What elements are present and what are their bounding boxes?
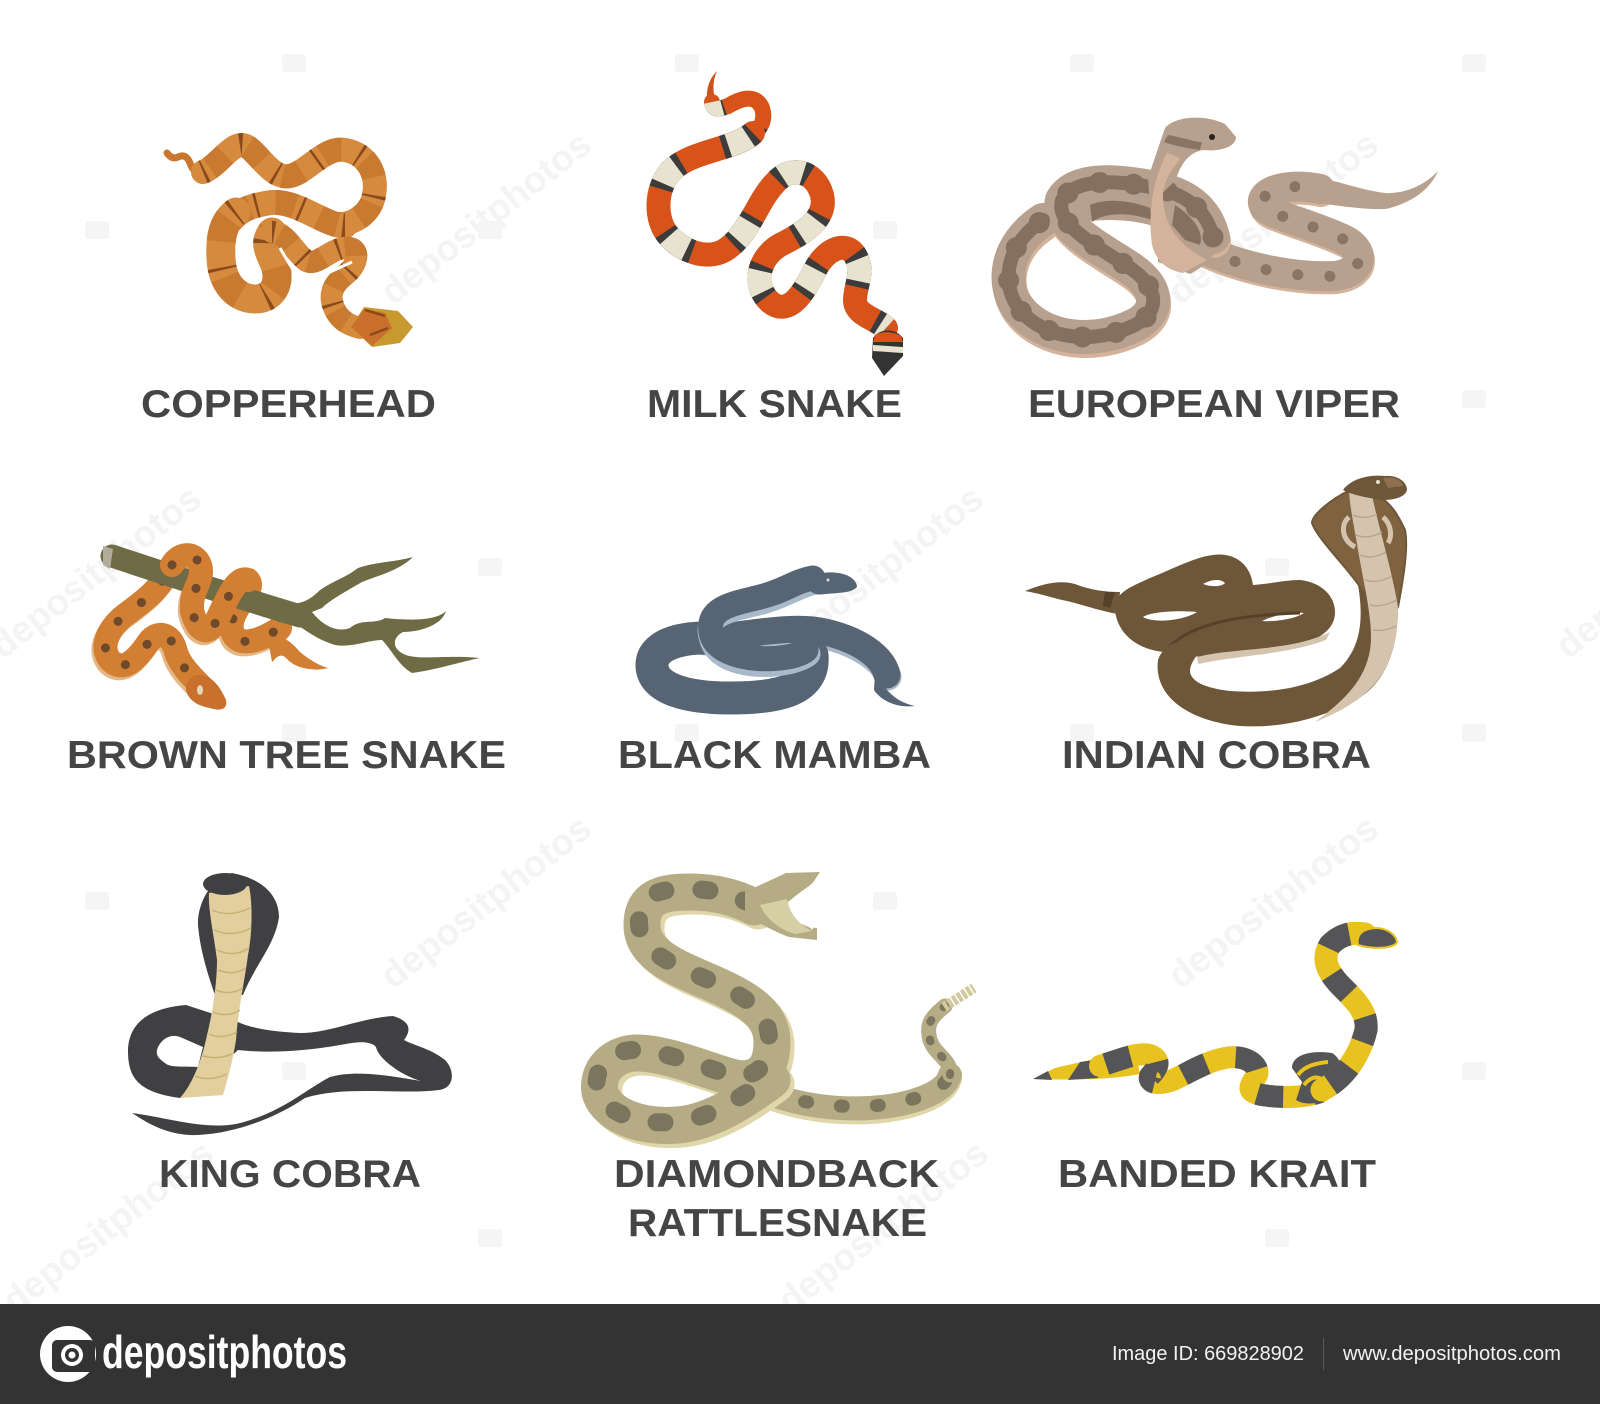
cobra belly ribs: [1353, 514, 1397, 630]
black mamba head: [808, 572, 857, 595]
footer bar: [0, 1304, 1600, 1404]
king cobra body: [128, 1005, 452, 1135]
label: indian cobra: INDIAN COBRA: [1062, 734, 1371, 777]
cobra head: [1343, 476, 1407, 500]
krait coil: [1292, 1052, 1343, 1104]
krait head: [1358, 928, 1397, 948]
watermark text layer: depositphotos: [1160, 123, 1386, 312]
snake: king cobra: [128, 873, 452, 1135]
snake: diamondback rattlesnake: [597, 872, 974, 1129]
viper top coil filler: [1068, 198, 1160, 205]
watermark text layer: depositphotos: [765, 477, 991, 666]
label: diamondback rattlesnake: [614, 1153, 939, 1245]
snake: copperhead: [167, 145, 413, 347]
watermark text layer: depositphotos: [0, 1132, 221, 1321]
watermark text layer: depositphotos: [373, 807, 599, 996]
label: copperhead: COPPERHEAD: [141, 383, 436, 426]
milk snake head: [872, 330, 903, 376]
cobra hood: [1312, 490, 1406, 607]
snake: indian cobra: [1025, 476, 1407, 726]
snake: banded krait: [1033, 928, 1397, 1104]
watermark text layer: depositphotos: [770, 1132, 996, 1321]
label: diamondback rattlesnake: RATTLESNAKE: [628, 1202, 927, 1245]
branch: [103, 546, 480, 673]
footer logo wordmark: depositphotos: [102, 1326, 347, 1378]
footer logo icon: [40, 1326, 96, 1382]
cobra tail: [1025, 582, 1120, 614]
king cobra head: [203, 873, 247, 895]
king cobra hood: [198, 873, 279, 995]
cobra hood marks: [1343, 517, 1391, 547]
label: milk snake: MILK SNAKE: [647, 383, 902, 426]
label: diamondback rattlesnake: DIAMONDBACK: [614, 1153, 939, 1196]
label: black mamba: BLACK MAMBA: [618, 734, 931, 777]
snake: brown tree snake: [103, 546, 480, 710]
footer website: www.depositphotos.com: [1342, 1343, 1561, 1365]
snake: milk snake: [658, 71, 903, 376]
cobra neck and lower body: [1158, 585, 1398, 726]
copperhead head: [351, 307, 413, 347]
rattlesnake open-mouth head: [745, 872, 820, 940]
viper raised neck: [1148, 118, 1236, 273]
viper tail: [1300, 171, 1438, 209]
label: brown tree snake: BROWN TREE SNAKE: [67, 734, 506, 777]
cobra upper coils: [1115, 554, 1335, 657]
snake: european viper: [1008, 118, 1438, 341]
snake: black mamba: [652, 572, 915, 706]
king cobra belly: [180, 886, 252, 1098]
krait tail: [1033, 1050, 1140, 1079]
label: king cobra: KING COBRA: [159, 1153, 421, 1196]
brown tree snake head: [186, 675, 226, 710]
cobra belly: [1315, 490, 1398, 722]
footer image id: Image ID: 669828902: [1112, 1343, 1304, 1365]
watermark text layer: depositphotos: [373, 123, 599, 312]
label: banded krait: BANDED KRAIT: [1058, 1153, 1376, 1196]
king cobra belly ribs: [195, 908, 251, 1079]
rattle: [944, 988, 974, 1007]
watermark text layer: depositphotos: [1160, 807, 1386, 996]
label: european viper: EUROPEAN VIPER: [1028, 383, 1400, 426]
